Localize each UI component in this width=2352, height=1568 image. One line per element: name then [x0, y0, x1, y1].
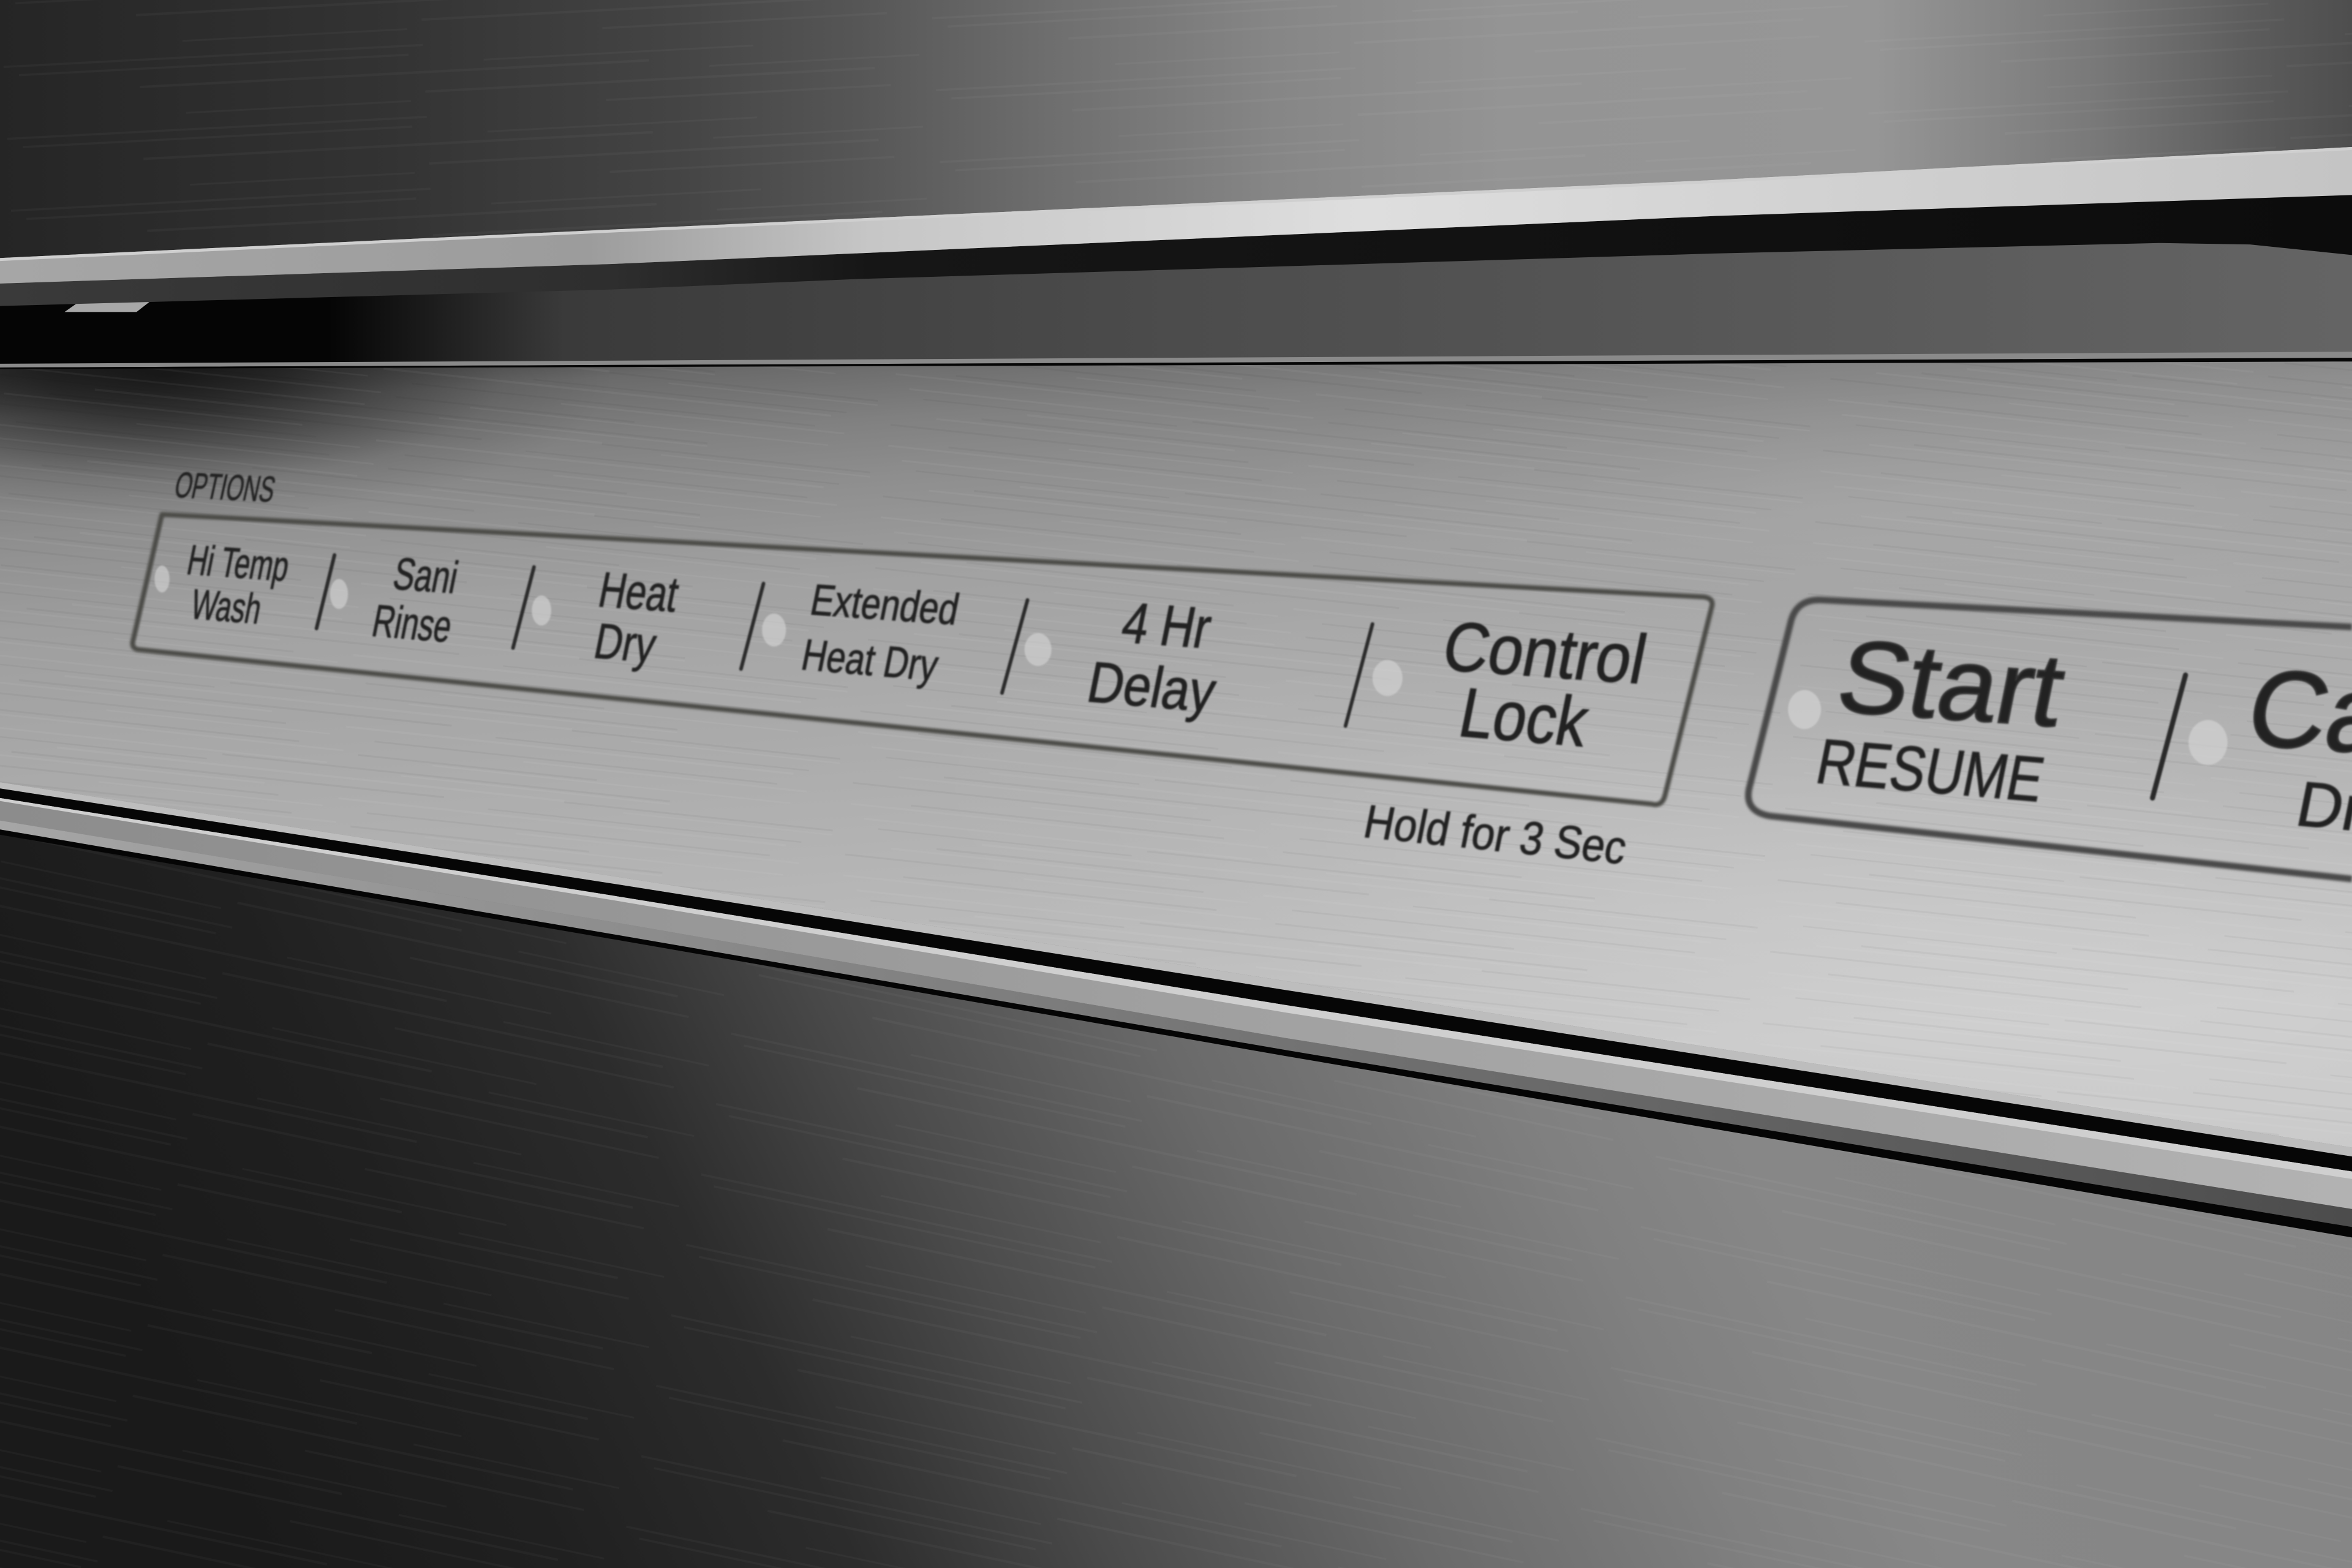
upper door panel — [0, 0, 2352, 264]
extended heat dry label — [797, 576, 963, 690]
hi temp wash label — [183, 536, 293, 633]
sani rinse label: Rinse — [368, 595, 456, 652]
indicator lights — [1788, 690, 2228, 765]
control lock label: Lock — [1453, 674, 1595, 761]
stainless control panel — [0, 361, 2352, 1148]
start resume label — [1811, 619, 2074, 815]
4 hr delay label: Delay — [1082, 650, 1221, 724]
hold for 3 sec note: Hold for 3 Sec — [1360, 795, 1631, 875]
control lock label — [1437, 608, 1653, 761]
door handle — [0, 147, 2352, 306]
start resume label: RESUME — [1811, 726, 2050, 815]
4 hr delay label: 4 Hr — [1117, 590, 1216, 660]
lower door panel — [0, 835, 2352, 1568]
4 hr delay label — [1082, 590, 1221, 724]
heat dry label: Heat — [594, 562, 684, 623]
start and cancel button group — [1748, 600, 2352, 879]
recessed gap below handle — [0, 189, 2352, 372]
extended heat dry label: Heat Dry — [797, 630, 942, 690]
options button group — [133, 514, 1712, 805]
button divider — [2152, 675, 2185, 798]
hi temp wash label: Wash — [187, 580, 266, 633]
lower trim strip — [0, 782, 2352, 1239]
sani rinse label — [368, 548, 462, 652]
extended heat dry label: Extended — [807, 576, 963, 635]
options section label: OPTIONS — [171, 464, 279, 510]
start resume label: Start — [1829, 619, 2074, 748]
dividers — [317, 555, 1373, 726]
sani rinse label: Sani — [390, 548, 462, 603]
options outline — [133, 514, 1712, 805]
control lock label: Control — [1437, 608, 1653, 699]
button outline — [1748, 600, 2352, 879]
heat dry label — [590, 562, 684, 673]
cancel drain label — [2238, 646, 2352, 853]
indicator lights — [154, 565, 1403, 696]
heat dry label: Dry — [590, 613, 661, 673]
hi temp wash label: Hi Temp — [183, 536, 293, 590]
